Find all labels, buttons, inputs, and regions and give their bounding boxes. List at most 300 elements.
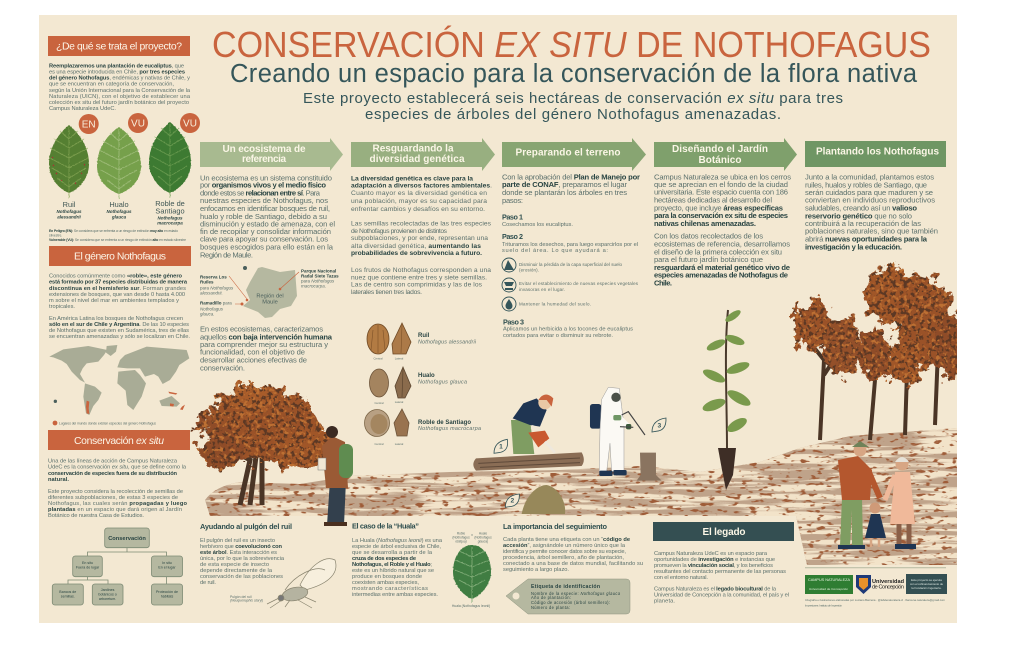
text: el legado: promueven la vinculación social, y los beneficios <box>654 563 773 569</box>
seeds: hualo: Central <box>374 401 384 405</box>
text: preparando el terreno: Con la aprobación del Plan de Manejo por <box>502 172 640 181</box>
text: plantando los nothofagus: saludables, creando así un valioso <box>805 203 917 212</box>
label: radal siete tazas: para Nothofagus <box>301 278 335 284</box>
text: erosión: Disminuir la pérdida de la capa superficial del suelo <box>519 262 622 267</box>
world map <box>49 345 189 415</box>
node: protección de hábitats: hábitats <box>161 594 173 598</box>
map legend: Lugares del mundo donde existen especies del género Nothofagus <box>59 422 156 426</box>
text: El pulgón del ruil es un insecto <box>200 538 275 544</box>
sprayer worker <box>590 387 645 476</box>
arrow: un ecosistema de referencia: Un ecosistema de <box>222 144 306 155</box>
text: diseñando el jardín botánico: que se aprecian en el fondo de la ciudad <box>654 180 788 189</box>
illustration: left tree <box>197 384 335 505</box>
man <box>838 441 880 549</box>
seeds: roble de santiago <box>364 409 409 446</box>
arrow: diseñando el jardín botánico: Diseñando el Jardín <box>672 144 768 155</box>
text: conservación: diferentes subpoblaciones, de estas 3 especies de <box>48 495 178 501</box>
text: género description: de Nothofagus que existen en Sudamérica, tres de ellas <box>49 328 189 334</box>
child <box>865 502 886 547</box>
footnotes: UICN categories: Vulnerable (VU): Se considera que se enfrenta a un riesgo de extinción alto en estado silvestre <box>49 238 186 242</box>
text: accesión”, asignándole un número único que la <box>503 543 626 549</box>
heading: de qué se trata <box>48 36 190 56</box>
parents labels: obliqua) <box>455 540 467 544</box>
text: diversidad genética: enfrentar cambios y desafíos en su entorno. <box>351 206 485 213</box>
text: diversidad genética: nuez que contiene entre tres y siete semillas. <box>351 274 487 281</box>
text: mostrando características <box>352 586 428 592</box>
leaf: ruil <box>49 125 89 198</box>
text: plantando los nothofagus: reservorio genético que no solo <box>805 211 912 220</box>
identification tag: Número de planta: <box>531 605 570 610</box>
seeds: ruil: Central <box>373 356 383 360</box>
text: diseñando el jardín botánico: resguardará el material genético vivo de <box>654 263 790 272</box>
text: conectado a una base de datos mundial, facilitando su <box>503 561 643 567</box>
icon: especies invasoras <box>502 278 516 292</box>
step marker 1 <box>494 439 508 453</box>
text: identifica y permite conocer datos sobre su especie, <box>503 549 626 555</box>
arrow: resguardando la diversidad genética <box>351 138 495 171</box>
text <box>200 538 285 586</box>
north mark <box>243 266 247 270</box>
identification tag: Código de accesión (árbol semillero): <box>531 600 610 605</box>
section: la importancia del seguimiento <box>503 522 643 614</box>
text: un ecosistema de referencia: fin de recopilar y consolidar información <box>200 227 331 236</box>
node: ex situ: Fuera de lugar <box>76 566 100 570</box>
node: jardines botánicos: arboretum. <box>99 597 116 601</box>
intro text: especies de árboles del género Nothofagus amenazadas. <box>365 106 781 123</box>
region label: Región del <box>256 294 284 300</box>
text: un ecosistema de referencia: bosques escogidos para ello están en la <box>200 243 334 252</box>
text: humedad: Mantener la humedad del suelo. <box>519 302 591 306</box>
species labels: macrocarpa <box>157 220 183 226</box>
arrow: preparando el terreno <box>502 138 646 171</box>
node: ex situ <box>73 556 102 577</box>
text: preparando el terreno: suelo del área. Lo que ayudará a: <box>502 248 608 254</box>
label: radal siete tazas: macrocarpa. <box>301 284 326 288</box>
text: preparando el terreno: cortados para evitar o disminuir su rebrote. <box>503 333 613 339</box>
text: diseñando el jardín botánico: el diseño de la primera colección ex situ <box>654 247 782 256</box>
parents labels: (Nothofagus <box>474 536 492 540</box>
box: plantando los nothofagus <box>805 141 946 167</box>
parents labels: x <box>471 533 473 537</box>
heading: La importancia del seguimiento <box>503 522 607 531</box>
label: los ruiles: Ruiles <box>200 280 214 284</box>
text: un ecosistema de referencia: Un ecosistema es un sistema constituido <box>200 173 332 182</box>
text: conservación: Botánico de nuestra Casa de Estudios. <box>48 513 144 519</box>
text: especies invasoras: invasoras en el lugar. <box>519 287 565 292</box>
text: project description: colección ex situ del futuro jardín botánico del proyecto <box>49 100 189 106</box>
text: preparando el terreno: donde se plantarán los árboles en tres <box>502 188 627 197</box>
label: radal siete tazas: Parque Nacional <box>301 268 336 274</box>
step marker 2 <box>505 494 519 507</box>
text: diseñando el jardín botánico: nativas chilenas amenazadas. <box>654 219 756 228</box>
text: de esta especie de insecto <box>200 562 269 568</box>
text: conservación: Una de las líneas de acción de Campus Naturaleza <box>48 458 178 464</box>
text: única, por lo que la sobrevivencia <box>200 556 285 562</box>
text: diversidad genética: una población, mayor es su capacidad para <box>351 198 487 205</box>
heading: El caso de la “Huala” <box>352 522 419 531</box>
seed labels <box>418 333 481 432</box>
section: el caso de la huala <box>352 522 492 608</box>
text: plantando los nothofagus: ruiles, hualos y robles de Santiago, que <box>805 180 927 189</box>
text: el legado: oportunidades de investigación e instancias que <box>654 557 775 563</box>
label: radal siete tazas: Radal Siete Tazas <box>301 274 339 278</box>
text: conservación de las poblaciones <box>200 574 283 580</box>
text: diversidad genética: probabilidades de sobrevivencia a futuro. <box>351 250 482 257</box>
arrow: resguardando la diversidad genética: diversidad genética <box>370 154 465 165</box>
text: diseñando el jardín botánico: Con los datos recolectados de los <box>654 232 763 241</box>
text: este árbol. Esta interacción es <box>200 550 277 556</box>
worker with chainsaw <box>511 395 555 454</box>
text: diseñando el jardín botánico: Chile. <box>654 279 672 288</box>
icon: humedad <box>502 297 516 311</box>
badge: VU roble: VU <box>183 118 197 130</box>
text: diseñando el jardín botánico: hectáreas dedicadas al desarrollo del <box>654 195 772 204</box>
text: conservación: UdeC es la conservación ex situ, que se define como la <box>48 464 187 470</box>
text: un ecosistema de referencia: hualo y roble de Santiago, debido a su <box>200 212 327 221</box>
logo: universidad de concepción: Universidad <box>872 579 905 585</box>
text: género description: extensiones de bosques, que van desde 0 hasta 4.000 <box>49 292 185 298</box>
text: estos ecosistemas <box>200 324 333 372</box>
seed labels: Roble de Santiago <box>418 420 471 426</box>
species labels: glauca <box>111 214 127 220</box>
text: diversidad genética: Cuanto mayor es la diversidad genética en <box>351 190 487 197</box>
credits: Impresiones: Instituto de Impresión <box>805 604 842 608</box>
text: un ecosistema de referencia <box>200 173 335 260</box>
text: género description: sólo en el sur de Chile y Argentina. De las 10 especies <box>49 322 189 328</box>
badge: VU roble <box>180 113 200 133</box>
text: depende directamente de la <box>200 568 273 574</box>
text: conservación: Este proyecto considera la recolección de semillas de <box>48 489 183 495</box>
text: diseñando el jardín botánico: especies amenazadas de Nothofagus de <box>654 271 788 280</box>
text: preparando el terreno: Cosechamos los eucaliptus. <box>502 222 573 228</box>
text: género description <box>49 274 190 340</box>
text: estos ecosistemas: conservación. <box>200 363 245 372</box>
text: de ruil. <box>200 580 216 586</box>
intro text <box>303 90 843 123</box>
illustration: sapling <box>701 308 753 490</box>
text: el legado <box>654 551 789 604</box>
text: diversidad genética: de Nothofagus provienen de distintos <box>351 228 448 235</box>
region label <box>256 294 284 306</box>
node: in situ <box>152 556 182 577</box>
text: preparando el terreno: parte de CONAF, preparamos el lugar <box>502 180 627 189</box>
text: diseñando el jardín botánico: para el futuro jardín botánico que <box>654 255 763 264</box>
text: conservación <box>48 458 188 519</box>
identification tag <box>506 579 630 614</box>
logos <box>805 568 947 608</box>
text: plantando los nothofagus: investigación y la educación. <box>805 243 902 252</box>
logo: universidad de concepción <box>856 575 905 594</box>
text: especie de árbol exclusiva de Chile, <box>352 544 441 550</box>
leaf: hualo <box>97 127 141 199</box>
text: project description: es una especie introducida en Chile, por tres especies <box>49 70 185 76</box>
seed labels: Nothofagus alessandrii <box>418 340 477 346</box>
text: plantando los nothofagus <box>805 173 938 252</box>
text: conservación: natural. <box>48 477 69 483</box>
text: este es un híbrido natural que se <box>352 568 434 574</box>
pointers <box>229 272 299 305</box>
species labels: Hualo <box>109 200 129 209</box>
text: Nothofagus, el Roble y el Hualo; <box>352 562 432 568</box>
panel: el género nothofagus <box>49 246 191 426</box>
text: preparando el terreno: Paso 2 <box>502 232 523 241</box>
label: radal siete tazas <box>301 268 339 288</box>
text: project description <box>49 64 191 112</box>
seed labels: Hualo <box>418 373 435 379</box>
text: Cada planta tiene una etiqueta con un “código de <box>503 537 630 543</box>
species labels: Ruil <box>63 200 76 209</box>
logo: campus naturaleza <box>805 575 853 594</box>
text: plantando los nothofagus: serán cuidados para que maduren y se <box>805 188 933 197</box>
section: ayudando al pulgón <box>200 522 336 608</box>
parents labels: (Nothofagus <box>452 536 470 540</box>
text: género description: m sobre el nivel del mar en ambientes templados y <box>49 298 179 304</box>
text: diseñando el jardín botánico: para la conservación ex situ de especies <box>654 211 788 220</box>
text: diversidad genética: laterales tienen tres lados. <box>351 289 422 296</box>
text: herbívoro que coevolucionó con <box>200 544 283 550</box>
text: género description: discontinua en el hemisferio sur. Forman grandes <box>49 286 186 292</box>
leaf caption: Huala (Nothofagus leonii) <box>452 604 490 608</box>
illustration: researcher woman <box>318 426 353 526</box>
text: plantando los nothofagus: conviertan en individuos reproductivos <box>805 196 935 205</box>
text: plantando los nothofagus: poblaciones naturales, sino que también <box>805 227 938 236</box>
leaf: roble de santiago <box>149 122 191 198</box>
seeds: hualo: Lateral <box>395 400 404 404</box>
text: un ecosistema de referencia: enfocamos en identificar bosques de ruil, <box>200 204 330 213</box>
subtitle: Creando un espacio para la conservación de la flora nativa <box>230 60 918 88</box>
text: género description: En América Latina los bosques de Nothofagus crecen <box>49 316 183 322</box>
arrow: un ecosistema de referencia: referencia <box>242 154 286 165</box>
text: cruza de dos especies de <box>352 556 416 562</box>
grandmother <box>885 457 916 549</box>
aphid label: (Neuquenaphis staryi) <box>230 598 263 602</box>
text: preparando el terreno <box>502 172 640 339</box>
heading: el género <box>49 246 191 266</box>
text: conservación: conservación de especies fuera de su distribución <box>48 471 178 477</box>
text: diseñando el jardín botánico <box>654 172 791 288</box>
text: diversidad genética <box>351 176 492 296</box>
text: preparando el terreno: pasos: <box>502 196 523 205</box>
parents labels <box>452 532 492 544</box>
species labels: Nothofagus <box>106 209 132 214</box>
step marker 3: 3 <box>657 422 661 429</box>
node: in situ: En el lugar <box>158 566 176 570</box>
seeds <box>364 323 481 446</box>
title: CONSERVACIÓN EX SITU DE NOTHOFAGUS <box>212 24 931 65</box>
concept diagram <box>52 528 182 605</box>
text: género description: está formado por 37 especies distribuidas de manera <box>49 280 188 286</box>
text: diseñando el jardín botánico: universitaria. Este espacio cuenta con 186 <box>654 188 788 197</box>
text: preparando el terreno: Trituramos los desechos, para luego esparcirlos por el <box>502 242 638 248</box>
illustration: family planting <box>838 441 916 549</box>
heading: conservación ex situ <box>48 430 190 450</box>
node: in situ: In situ <box>162 561 172 565</box>
text: diseñando el jardín botánico: ecosistemas de referencia, desarrollamos <box>654 240 790 249</box>
node: bancos de semillas: semillas. <box>61 594 75 598</box>
text: un ecosistema de referencia: disminución y estado de amenaza, con el <box>200 219 335 228</box>
node: jardines botánicos <box>92 584 123 605</box>
credits <box>805 598 946 608</box>
heading: conservación ex situ: Conservación ex situ <box>74 436 164 447</box>
text: el legado: con el entorno natural. <box>654 575 708 581</box>
text: intermedias entre ambas especies. <box>352 592 438 598</box>
label: los ruiles: para Nothofagus <box>200 286 234 290</box>
seeds: ruil: Lateral <box>395 356 404 360</box>
label: los ruiles: alessandrii. <box>200 290 223 296</box>
text: plantando los nothofagus: contribuirá a la recuperación de las <box>805 219 921 228</box>
text: produce en bosques donde <box>352 574 422 580</box>
text: coexisten ambas especies, <box>352 580 419 586</box>
text: que se desarrolla a partir de la <box>352 550 433 556</box>
text: project description: que se encuentran en categoría de conservación, <box>49 82 174 88</box>
node: conservación: Conservación <box>108 536 146 542</box>
credits: Infografía e ilustraciones elaboradas por Luciano Barcena · @labdenaturaleza.cl · lbarcena.naturaleza@gmail.com <box>805 598 946 602</box>
box: plantando los nothofagus: Plantando los Nothofagus <box>816 146 939 158</box>
text: project description: según la Unión Internacional para la Conservación de la <box>49 88 191 94</box>
text: estos ecosistemas: desarrollar acciones efectivas de <box>200 356 307 365</box>
step marker 3 <box>652 418 666 432</box>
label: ramadillo <box>200 300 232 316</box>
text: project description: Reemplazaremos una plantación de eucaliptus, que <box>49 64 184 70</box>
heading: de qué se trata: ¿De qué se trata el proyecto? <box>56 42 182 52</box>
node: protección de hábitats <box>152 584 182 605</box>
text: género description: se encuentran amenazadas y sólo se localizan en Chile. <box>49 334 190 340</box>
region shape <box>243 267 297 318</box>
aphid label <box>230 595 263 602</box>
mound of mulch <box>522 485 565 514</box>
seed labels: Nothofagus macrocarpa <box>418 426 481 432</box>
text: diversidad genética: Las de centro son comprimidas y las de los <box>351 282 483 289</box>
text: preparando el terreno: Paso 3 <box>503 318 524 326</box>
seed labels: Nothofagus glauca <box>418 380 467 386</box>
species labels: Santiago <box>155 206 185 216</box>
text: un ecosistema de referencia: donde estos se relacionan entre sí. Para <box>200 188 321 197</box>
text: el legado: Universidad de Concepción a la comunidad, el país y el <box>654 592 789 598</box>
panel: de qué se trata <box>48 36 200 242</box>
illustration: workers, log, stump <box>473 387 666 514</box>
text: el legado: planeta. <box>654 598 675 604</box>
text: La Huala (Nothofagus leonii) es una <box>352 538 443 544</box>
aphid label: Pulgón del ruil <box>230 595 252 599</box>
heading: el legado <box>653 522 794 541</box>
sponsor box <box>906 574 947 594</box>
identification tag: Año de plantación: <box>531 595 571 600</box>
parents labels: Roble <box>457 532 465 536</box>
text: un ecosistema de referencia: por organismos vivos y el medio físico <box>200 181 326 190</box>
sponsor box: Este proyecto se ejecuta <box>911 578 942 582</box>
node: bancos de semillas <box>52 584 83 605</box>
text: estos ecosistemas: para comprender mejor su estructura y <box>200 340 328 349</box>
parents labels: Hualo <box>479 532 487 536</box>
intro text: Este proyecto establecerá seis hectáreas de conservación ex situ para tres <box>303 90 843 107</box>
parents labels: glauca) <box>478 540 488 544</box>
text: diversidad genética: subpoblaciones, y por ende, representan una <box>351 235 488 242</box>
badge: VU ruil: VU <box>131 118 145 130</box>
text: diversidad genética: adaptación a diversos factores ambientales. <box>351 182 492 190</box>
text: diseñando el jardín botánico: proyecto, que incluye áreas específicas <box>654 203 783 212</box>
label: ramadillo: Nothofagus <box>200 306 224 312</box>
footnotes: UICN categories <box>49 229 186 242</box>
seeds: roble de santiago: Lateral <box>395 442 404 446</box>
logo: campus naturaleza: CAMPUS NATURALEZA <box>808 578 850 582</box>
label: ramadillo: glauca. <box>200 312 215 316</box>
species labels: Roble de <box>155 199 185 208</box>
section: el legado <box>653 522 794 604</box>
text: preparando el terreno: Aplicamos un herbicida a los tocones de eucaliptus <box>503 326 633 332</box>
arrow: diseñando el jardín botánico <box>654 138 797 171</box>
text: un ecosistema de referencia: clave para apoyar su conservación. Los <box>200 235 328 244</box>
sponsor box: con el cofinanciamiento de <box>910 582 943 586</box>
node: jardines botánicos: botánicos o <box>98 592 117 596</box>
arrow: un ecosistema de referencia <box>200 138 343 171</box>
text: el legado: resultantes del contacto permanente de las personas <box>654 569 786 575</box>
seeds: ruil <box>367 323 411 360</box>
label: los ruiles <box>200 274 234 296</box>
badge: VU ruil <box>128 113 148 133</box>
stump <box>637 453 662 481</box>
log <box>473 452 584 471</box>
text: plantando los nothofagus: Junto a la comunidad, plantamos estos <box>805 173 934 182</box>
label: los ruiles: Reserva Los <box>200 274 227 280</box>
node: ex situ: En situ <box>82 561 93 565</box>
text: diversidad genética: Los frutos de Nothofagus corresponden a una <box>351 267 491 274</box>
step marker 2: 2 <box>510 498 514 505</box>
text: el legado: Campus Naturaleza UdeC es un espacio para <box>654 551 768 557</box>
footnotes: UICN categories: silvestre. <box>49 234 62 238</box>
species labels: Nothofagus <box>158 216 183 220</box>
logo: campus naturaleza: Universidad de Concepción <box>809 587 848 591</box>
identification tag: Etiqueta de identificación <box>531 584 600 590</box>
text: erosión: (erosión). <box>519 268 539 272</box>
seed labels: Ruil <box>418 333 430 339</box>
text: género description: tropicales. <box>49 304 75 310</box>
text: project description: Naturaleza (UICN), con el objetivo de establecer una <box>49 94 191 100</box>
text: diseñando el jardín botánico: Campus Naturaleza se ubica en los cerros <box>654 172 791 181</box>
text: diversidad genética: alta diversidad genética, aumentando las <box>351 243 481 250</box>
map: región del maule <box>200 266 339 318</box>
heading: el género: El género Nothofagus <box>74 252 166 262</box>
node: bancos de semillas: Bancos de <box>59 590 76 594</box>
heading: Ayudando al pulgón del ruil <box>200 522 292 531</box>
text: procedencia, árbol semillero, año de plantación, <box>503 555 624 561</box>
text <box>352 538 443 598</box>
icon: erosión <box>502 258 516 272</box>
text: el legado: Campus Naturaleza es el legado biocultural de la <box>654 586 777 592</box>
seeds: hualo <box>370 367 411 405</box>
text: estos ecosistemas: aquellos con baja intervención humana <box>200 332 333 341</box>
text: plantando los nothofagus: abrirá nuevas oportunidades para la <box>805 235 928 244</box>
text: estos ecosistemas: funcionalidad, con el objetivo de <box>200 348 305 357</box>
text: conservación: plantadas en un espacio que dará origen al Jardín <box>48 507 182 513</box>
arrow: diseñando el jardín botánico: Botánico <box>698 155 742 166</box>
logo: universidad de concepción: de Concepción <box>872 584 904 590</box>
text: especies invasoras: Evitar el establecimiento de nuevas especies vegetales <box>519 281 639 286</box>
footnotes: UICN categories: En Peligro (EN): Se considera que se enfrenta a un riesgo de extinción muy alto en estado <box>49 229 178 233</box>
species labels: Nothofagus <box>56 209 82 214</box>
sponsor box: la Fundación Ingeniería. <box>911 586 942 590</box>
arrow: resguardando la diversidad genética: Resguardando la <box>372 144 454 154</box>
badge: EN <box>79 114 99 134</box>
text: conservación: Nothofagus, las cuales serán propagadas y luego <box>48 501 188 507</box>
node: jardines botánicos: Jardines <box>101 588 115 592</box>
leaf: huala <box>453 545 491 603</box>
arrow: preparando el terreno: Preparando el terreno <box>516 148 620 158</box>
species labels: alessandrii <box>57 214 82 220</box>
seeds: roble de santiago: Central <box>374 442 384 446</box>
text <box>503 537 643 573</box>
text: project description: del género Nothofagus, endémicas y nativas de Chile, y <box>49 76 190 82</box>
text: estos ecosistemas: En estos ecosistemas, caracterizamos <box>200 324 323 333</box>
